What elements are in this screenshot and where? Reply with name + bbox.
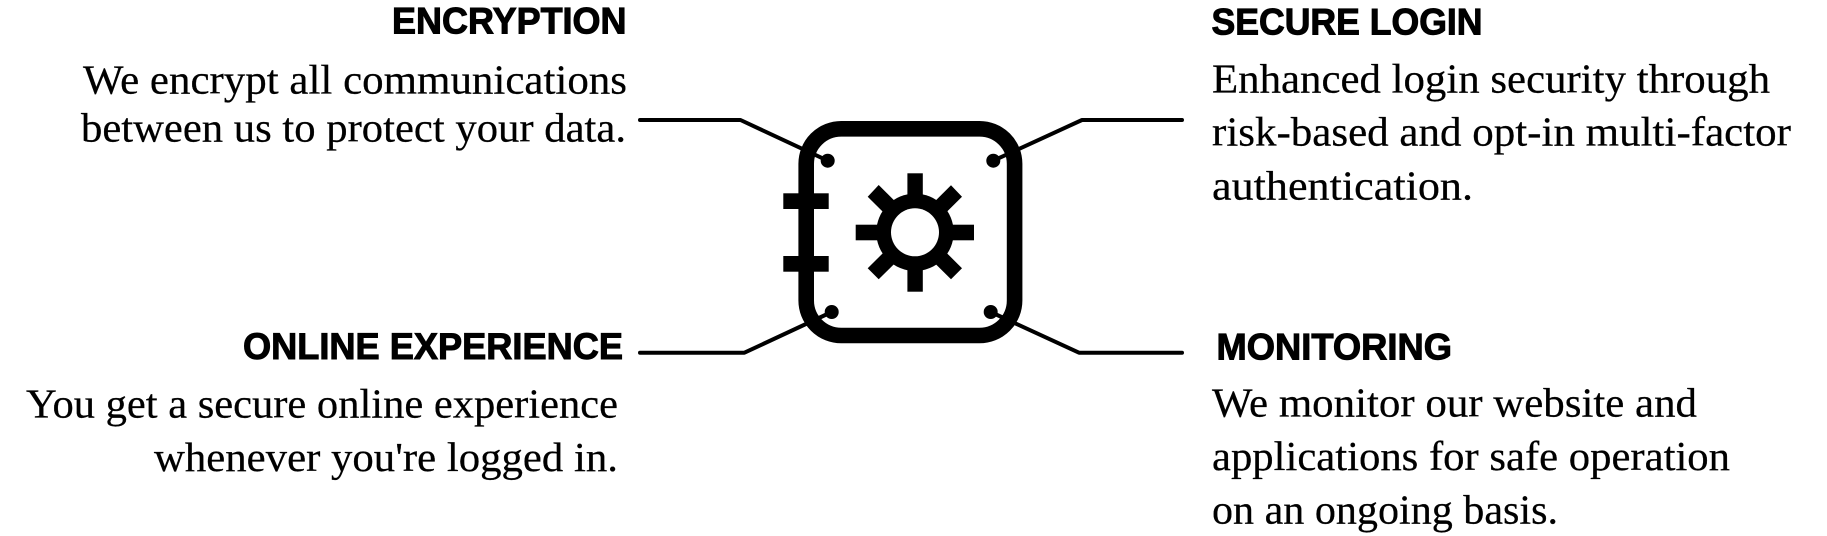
text block: encryption — [81, 56, 627, 151]
heading: online experience: ONLINE EXPERIENCE — [243, 326, 623, 367]
hinges — [783, 193, 829, 272]
text block: monitoring: applications for safe operation — [1212, 433, 1730, 479]
text block: monitoring: on an ongoing basis. — [1212, 486, 1558, 532]
text block: online experience: whenever you're logged in. — [154, 434, 618, 480]
heading: secure login: SECURE LOGIN — [1212, 2, 1482, 42]
connector: secure login — [988, 120, 1182, 166]
text block: monitoring: We monitor our website and — [1212, 380, 1697, 426]
connector: monitoring — [986, 307, 1182, 353]
connector: online experience — [640, 307, 837, 353]
text block: secure login: Enhanced login security through — [1212, 55, 1770, 101]
heading: encryption: ENCRYPTION — [392, 0, 626, 41]
panel: online experience — [26, 326, 623, 480]
text block: online experience: You get a secure online experience — [26, 380, 618, 426]
text block: monitoring — [1212, 380, 1730, 532]
panel: secure login — [1212, 2, 1791, 208]
text block: secure login: risk-based and opt-in multi-factor — [1212, 109, 1791, 155]
connector: encryption — [640, 120, 833, 166]
panel: encryption — [81, 0, 627, 151]
text block: encryption: between us to protect your data. — [81, 105, 626, 151]
heading: monitoring: MONITORING — [1216, 326, 1452, 367]
icon: safe with gear — [783, 129, 1015, 336]
text block: encryption: We encrypt all communications — [83, 56, 627, 102]
text block: online experience — [26, 380, 618, 480]
text block: secure login — [1212, 55, 1791, 208]
text block: secure login: authentication. — [1212, 162, 1473, 208]
safe body — [806, 129, 1015, 336]
panel: monitoring — [1212, 326, 1730, 532]
gear dial — [856, 173, 974, 292]
